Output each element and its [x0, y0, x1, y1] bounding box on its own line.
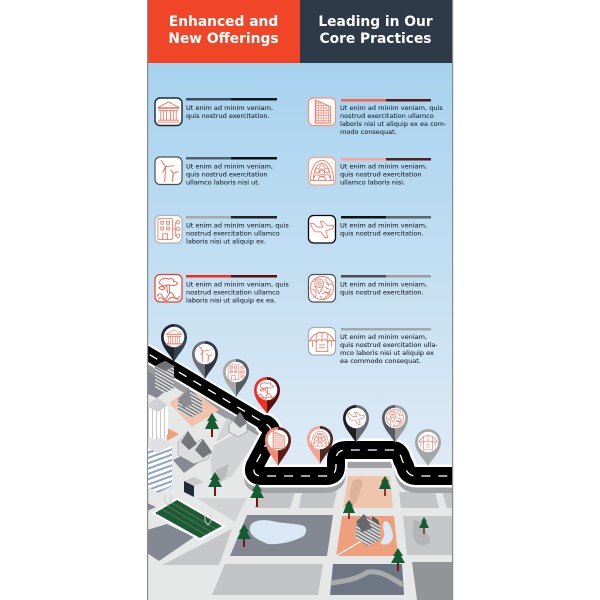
pin: tent: [415, 429, 441, 466]
item: left 2 wind turbines: [155, 157, 277, 186]
pin: wind turbines: [192, 341, 218, 379]
pin: organisation: [223, 359, 249, 397]
pin: people: [307, 426, 333, 464]
item: left 4 tree and water: [155, 274, 289, 304]
pin: plane: [343, 405, 369, 443]
building: hatched tower: [155, 361, 174, 393]
item: right 2 people: ullamco laboris nisi.: [340, 178, 405, 186]
map: panel edges: [147, 0, 453, 600]
building: black box: [184, 477, 204, 497]
building: house cluster: [178, 431, 212, 464]
panel: infographic background: [147, 0, 453, 600]
item: right 3 plane: [308, 216, 431, 243]
map: city ground and blocks: [147, 358, 453, 600]
item: right 4 globe: [308, 274, 431, 302]
item: right 4 globe: quis nostrud exercitation.: [340, 288, 424, 296]
pin: tower: [265, 427, 291, 466]
map: road: [135, 346, 460, 483]
item: right 2 people: quis nostrud exercitation: [340, 170, 422, 178]
item: right 5 tent: mco laboris nisi ut aliquip ex: [340, 349, 434, 357]
item: left 2 wind turbines: quis nostrud exercitation: [186, 170, 268, 178]
item: left 4 tree and water: Ut enim ad minim veniam, quis: [186, 280, 289, 288]
building: blue striped tower: [148, 438, 172, 493]
map: football field: [152, 495, 226, 541]
item: right 1 tower: nostrud exercitation ullamco: [340, 112, 434, 120]
item: right 2 people: [308, 158, 431, 186]
item: left 2 wind turbines: Ut enim ad minim veniam,: [186, 162, 273, 170]
heading: Enhanced and New Offerings: New Offerings: [168, 31, 279, 47]
item: right 1 tower: laboris nisi ut aliquip ex ea com-: [340, 120, 447, 128]
building: white tower: [148, 398, 168, 441]
item: left 3 organisation: laboris nisi ut aliquip ex.: [186, 238, 266, 246]
item: right 1 tower: modo consequat.: [340, 128, 397, 136]
item: right 5 tent: [308, 328, 438, 365]
trees: [205, 413, 429, 571]
item: right 1 tower: Ut enim ad minim veniam, quis: [340, 104, 443, 112]
item: right 3 plane: Ut enim ad minim veniam,: [340, 222, 427, 230]
pin: globe: [382, 405, 408, 443]
heading: Leading in Our Core Practices: [300, 0, 453, 63]
item: left 1 temple: [155, 98, 277, 126]
heading: Enhanced and New Offerings: Enhanced and: [169, 14, 278, 30]
pin: temple: [161, 324, 187, 362]
item: left 3 organisation: [155, 216, 289, 246]
item: right 5 tent: quis nostrud exercitation ulla-: [340, 341, 438, 349]
heading: Leading in Our Core Practices: Core Practices: [319, 31, 432, 47]
item: left 3 organisation: nostrud exercitation ullamco: [186, 230, 280, 238]
item: right 4 globe: Ut enim ad minim veniam,: [340, 280, 427, 288]
pin: tree and water: [254, 377, 280, 414]
heading: Enhanced and New Offerings: [147, 0, 300, 63]
item: left 2 wind turbines: ullamco laboris nisi ut.: [186, 178, 260, 186]
heading: Leading in Our Core Practices: Leading in Our: [318, 14, 433, 30]
item: left 4 tree and water: laboris nisi ut aliquip ex ea.: [186, 296, 276, 304]
item: left 3 organisation: Ut enim ad minim veniam, quis: [186, 222, 289, 230]
item: right 1 tower: [308, 98, 447, 136]
building: orange block house: [356, 514, 380, 546]
building: central house: [178, 388, 202, 418]
item: right 5 tent: ea commodo consequat.: [340, 357, 421, 365]
item: right 5 tent: Ut enim ad minim veniam,: [340, 333, 427, 341]
item: right 3 plane: quis nostrud exercitation.: [340, 230, 424, 238]
item: left 1 temple: quis nostrud exercitation.: [186, 112, 270, 120]
item: left 4 tree and water: nostrud exercitation ullamco: [186, 288, 280, 296]
item: right 2 people: Ut enim ad minim veniam,: [340, 162, 427, 170]
building: small house right: [229, 412, 247, 437]
item: left 1 temple: Ut enim ad minim veniam,: [186, 104, 273, 112]
